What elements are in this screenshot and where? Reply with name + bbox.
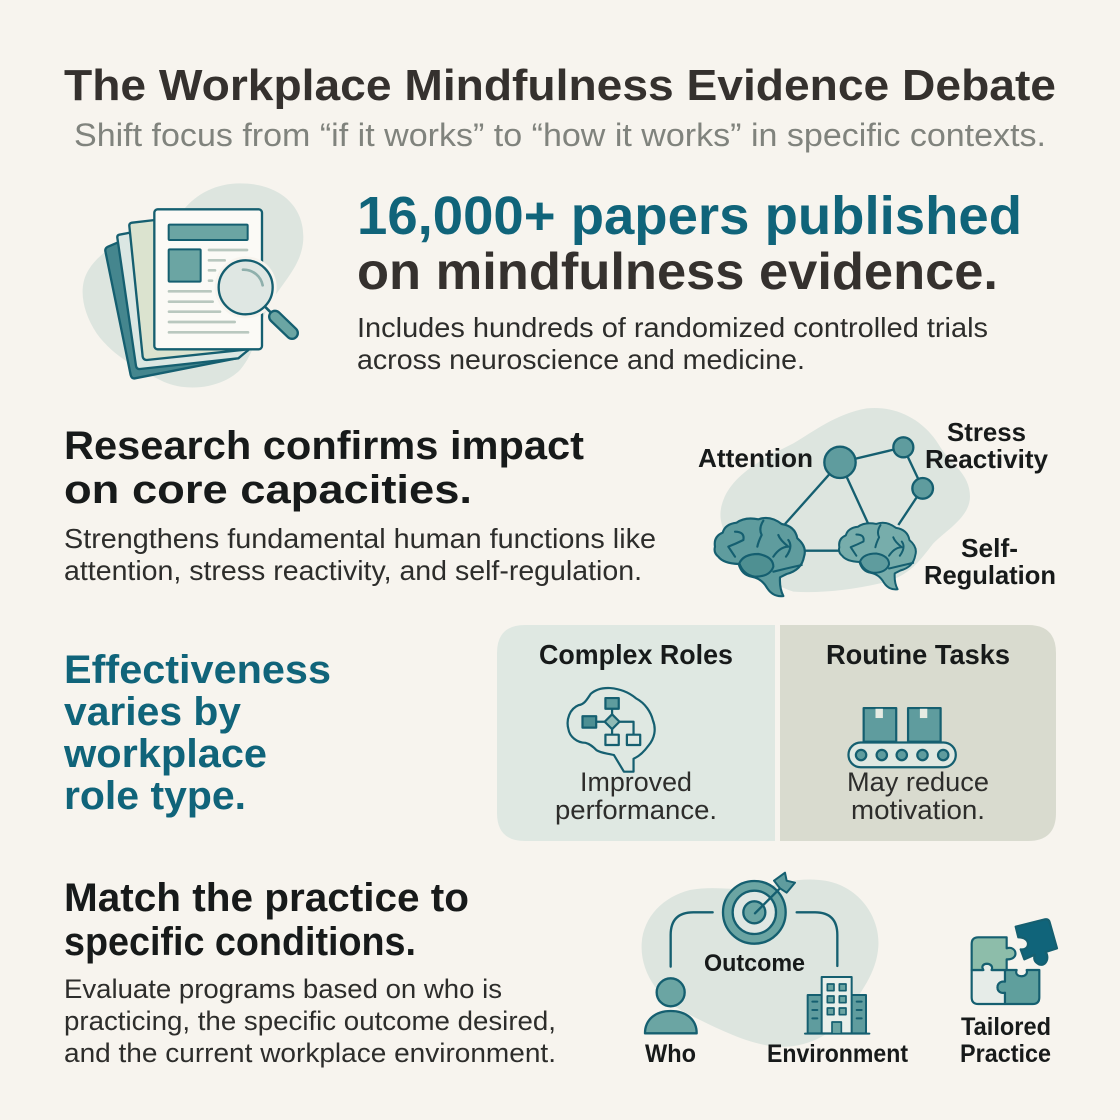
panel text <box>555 767 717 825</box>
label: who: Who <box>645 1040 696 1068</box>
label: self-regulation: Self- <box>961 533 1018 563</box>
text block: evidence description: across neuroscience and medicine. <box>357 344 805 375</box>
text block: evidence description <box>357 312 988 375</box>
icon: right brain <box>839 523 916 589</box>
text block: evaluate programs: and the current workplace environment. <box>64 1038 556 1068</box>
icon: target with arrow <box>723 873 795 944</box>
text block: core capacities description: attention, stress reactivity, and self-regulation. <box>64 555 642 586</box>
label: self-regulation <box>924 533 1056 590</box>
panel: complex roles <box>497 625 775 841</box>
text block: core capacities description <box>64 523 656 586</box>
label: stress reactivity: Stress <box>947 417 1026 447</box>
panel heading: Routine Tasks <box>826 639 1010 670</box>
heading: effectiveness varies: varies by <box>64 690 242 734</box>
panel: routine tasks <box>780 625 1056 841</box>
text block: evaluate programs <box>64 974 556 1068</box>
text block: evidence description: Includes hundreds of randomized controlled trials <box>357 312 988 343</box>
label: stress reactivity <box>925 417 1049 474</box>
network graphic <box>715 408 970 596</box>
label: attention: Attention <box>698 443 813 473</box>
panel text: motivation. <box>851 795 985 825</box>
icon: person <box>645 978 697 1033</box>
icon: brain with flowchart <box>568 688 655 772</box>
subtitle: Shift focus from “if it works” to “how it works” in specific contexts. <box>74 117 1046 153</box>
heading: research confirms impact <box>64 424 584 512</box>
panel heading: Complex Roles <box>539 639 733 670</box>
title: The Workplace Mindfulness Evidence Debate <box>64 61 1056 110</box>
label: environment: Environment <box>767 1040 909 1068</box>
headline: on mindfulness evidence: on mindfulness evidence. <box>357 243 998 301</box>
diagram: who, outcome, environment <box>642 873 909 1068</box>
heading: match the practice: Match the practice to <box>64 876 469 920</box>
text block: evaluate programs: Evaluate programs based on who is <box>64 974 502 1004</box>
icon: stacked papers with magnifying glass <box>83 183 303 388</box>
text block: evaluate programs: practicing, the specific outcome desired, <box>64 1006 556 1036</box>
label: tailored practice: Practice <box>960 1040 1051 1068</box>
heading: match the practice: specific conditions. <box>64 920 416 964</box>
heading: research confirms impact: Research confirms impact <box>64 424 584 468</box>
panel text: May reduce <box>847 767 989 797</box>
diagram: brain network <box>698 408 1056 596</box>
heading: match the practice <box>64 876 469 964</box>
background blob and connectors <box>642 879 878 1047</box>
heading: effectiveness varies: Effectiveness <box>64 648 331 692</box>
icon: left brain <box>715 518 805 596</box>
puzzle pieces <box>972 919 1057 1004</box>
heading: effectiveness varies: workplace <box>63 732 267 776</box>
label: stress reactivity: Reactivity <box>925 444 1049 474</box>
label: self-regulation: Regulation <box>924 560 1056 590</box>
icon: conveyor belt with boxes <box>848 708 956 767</box>
label: outcome: Outcome <box>704 950 805 977</box>
label: tailored practice <box>960 1013 1051 1068</box>
panel text <box>847 767 989 825</box>
panel text: performance. <box>555 795 717 825</box>
heading: effectiveness varies <box>63 648 331 818</box>
label: tailored practice: Tailored <box>961 1013 1051 1041</box>
icon: tailored practice puzzle <box>960 919 1057 1068</box>
icon: office building <box>805 977 869 1034</box>
panel text: Improved <box>580 767 692 797</box>
headline: 16,000+ papers: 16,000+ papers published <box>357 186 1022 246</box>
text block: core capacities description: Strengthens fundamental human functions like <box>64 523 656 554</box>
heading: effectiveness varies: role type. <box>64 774 246 818</box>
heading: research confirms impact: on core capacities. <box>64 468 472 512</box>
